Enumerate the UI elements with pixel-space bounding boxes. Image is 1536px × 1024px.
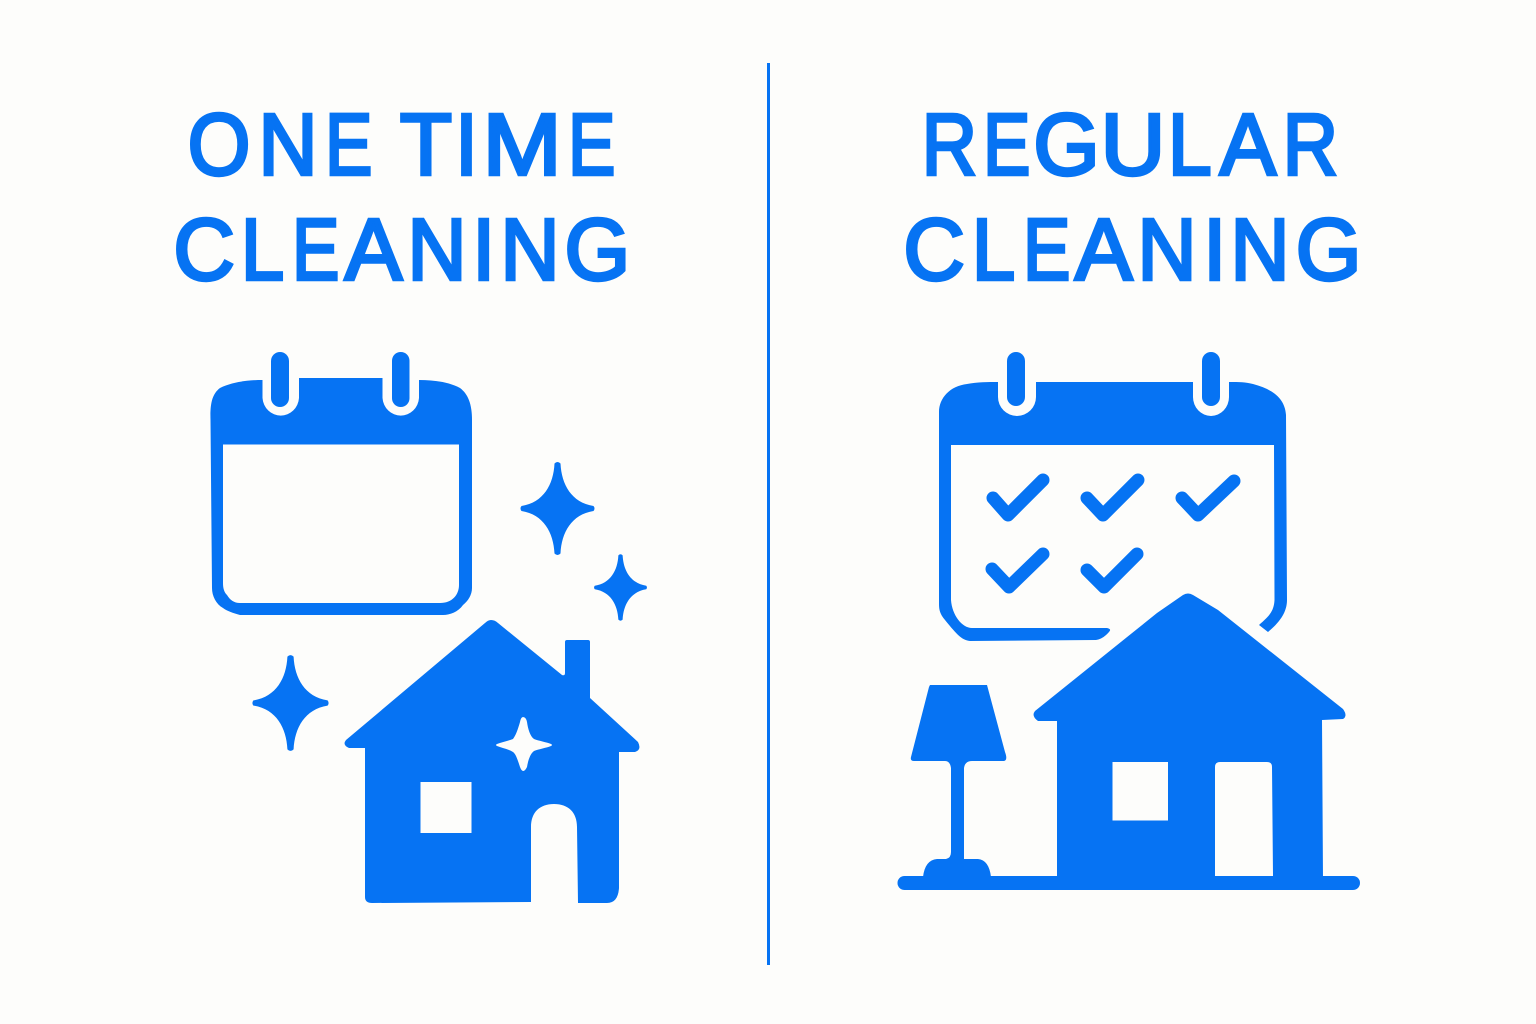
title: regular cleaning: A	[1220, 96, 1276, 194]
icon: house with sparkle	[345, 620, 639, 903]
title: regular cleaning: G	[1296, 202, 1362, 298]
title: one time cleaning: N	[500, 202, 560, 298]
title: regular cleaning: I	[1203, 202, 1226, 298]
icon: empty calendar	[210, 352, 472, 615]
title: regular cleaning: R	[1283, 96, 1338, 194]
title: one time cleaning: O	[188, 96, 250, 194]
title: one time cleaning: N	[408, 202, 466, 298]
title: one time cleaning: E	[568, 96, 615, 194]
ground line	[898, 876, 1360, 890]
title: regular cleaning: U	[1101, 96, 1165, 194]
title: one time cleaning: I	[455, 96, 478, 194]
icon: sparkle left	[252, 655, 329, 751]
title: one time cleaning: N	[258, 96, 318, 194]
icon: sparkle top	[520, 462, 594, 555]
title: regular cleaning: E	[983, 96, 1030, 194]
title: regular cleaning: G	[1033, 96, 1100, 194]
title: one time cleaning: T	[400, 96, 452, 194]
title: one time cleaning: L	[241, 202, 284, 298]
title: one time cleaning: I	[472, 202, 495, 298]
title: regular cleaning: R	[922, 96, 977, 194]
checkmarks	[992, 480, 1234, 587]
title: one time cleaning: A	[345, 202, 402, 298]
icon: large house	[1034, 594, 1346, 880]
title: regular cleaning: L	[972, 202, 1015, 298]
title: regular cleaning	[903, 96, 1362, 298]
title: regular cleaning: E	[1023, 202, 1070, 298]
icon: calendar with checkmarks	[939, 352, 1287, 641]
title: one time cleaning: E	[325, 96, 372, 194]
title: one time cleaning: M	[483, 96, 562, 194]
icon: floor lamp	[911, 685, 1006, 877]
title: regular cleaning: N	[1230, 202, 1290, 298]
title: one time cleaning	[173, 96, 630, 298]
center divider	[767, 63, 770, 965]
title: one time cleaning: E	[292, 202, 339, 298]
icon: sparkle right	[594, 554, 647, 621]
title: regular cleaning: C	[903, 202, 965, 298]
title: one time cleaning: G	[564, 202, 630, 298]
title: regular cleaning: L	[1168, 96, 1212, 194]
title: regular cleaning: A	[1075, 202, 1132, 298]
title: one time cleaning: C	[173, 202, 235, 298]
title: regular cleaning: N	[1138, 202, 1196, 298]
